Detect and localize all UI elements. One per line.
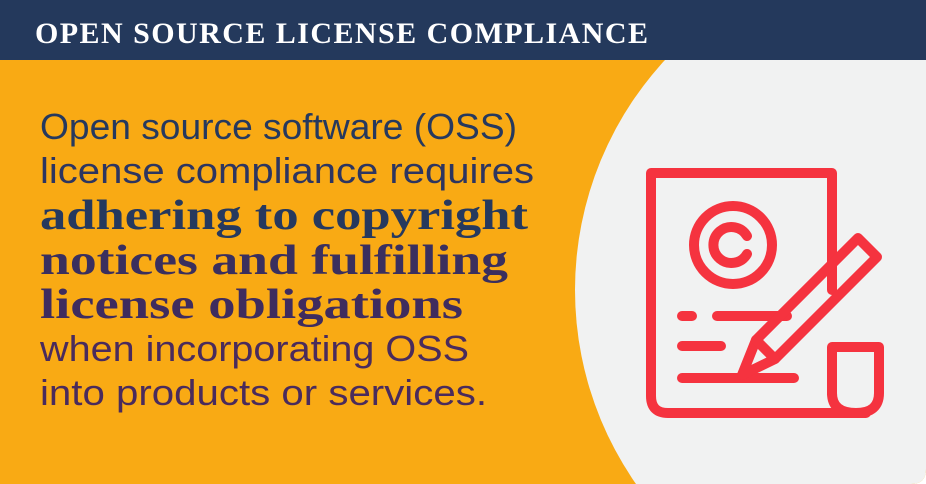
body text: notices and fulfilling (40, 238, 508, 284)
body text: license compliance requires (40, 150, 534, 191)
body text (39, 106, 534, 413)
body text: adhering to copyright (40, 193, 528, 239)
body text: license obligations (40, 282, 463, 328)
body text: into products or services. (40, 372, 487, 413)
body text: when incorporating OSS (39, 328, 469, 369)
header bar (0, 0, 926, 60)
gray circle area (575, 60, 926, 484)
body text: Open source software (OSS) (40, 106, 517, 147)
title: OPEN SOURCE LICENSE COMPLIANCE (35, 17, 648, 50)
icon: document with copyright and pencil (651, 173, 879, 413)
